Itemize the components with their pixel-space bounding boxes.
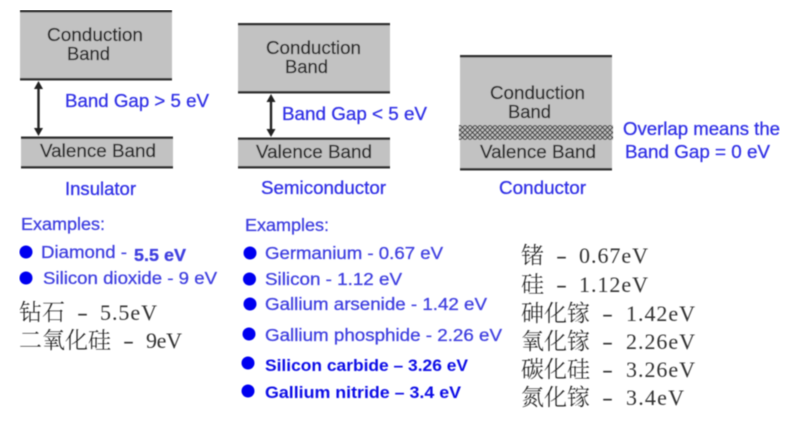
panel: semiconductor diagram [238, 23, 427, 198]
conduction band block: Conduction [47, 25, 143, 45]
row: silicon dioxide [19, 322, 182, 355]
conduction band block [238, 23, 390, 94]
overlapping bands block: Band [508, 102, 551, 122]
row: silicon carbide: - [602, 357, 613, 382]
row: germanium: 0.67eV [579, 243, 648, 268]
item: diamond: Diamond - [41, 242, 127, 262]
row: silicon carbide: 碳化硅 [521, 351, 590, 384]
row: diamond: 钻石 [19, 294, 65, 327]
conduction band block: Conduction [266, 38, 361, 58]
panel: conductor diagram [459, 55, 780, 198]
examples heading: Examples: [245, 215, 329, 235]
row: gallium nitride: - [602, 385, 613, 410]
row: silicon dioxide: - [123, 328, 134, 353]
row: gallium arsenide: 砷化镓 [521, 295, 590, 328]
band gap label: Band Gap > 5 eV [65, 91, 209, 111]
overlap label: Overlap means the [623, 119, 780, 139]
overlap label [623, 119, 780, 162]
conduction band block: Band [285, 57, 328, 77]
row: silicon [521, 266, 648, 299]
row: gallium nitride: 氮化镓 [521, 379, 590, 412]
valence band block [238, 138, 390, 168]
row: diamond: 5.5eV [100, 300, 157, 325]
overlapping bands block: Valence Band [480, 142, 596, 162]
row: diamond [19, 294, 157, 327]
panel: insulator diagram [20, 10, 209, 199]
arrow: band gap [266, 94, 276, 137]
row: silicon: 1.12eV [579, 272, 648, 297]
row: gallium nitride [521, 379, 684, 412]
row: gallium phosphide: 2.26eV [626, 329, 695, 354]
valence band block [21, 136, 173, 168]
row: germanium [521, 237, 648, 270]
row: gallium phosphide: 氧化镓 [521, 323, 590, 356]
conduction band block: Band [67, 44, 110, 64]
item: silicon dioxide: Silicon dioxide - 9 eV [43, 268, 217, 288]
item: gallium nitride: Gallium nitride – 3.4 eV [265, 383, 462, 402]
item: gallium phosphide: Gallium phosphide - 2.26 eV [265, 325, 502, 345]
chinese list: insulators [19, 294, 182, 355]
row: silicon dioxide: 9eV [146, 328, 182, 353]
overlap label: Band Gap = 0 eV [625, 142, 770, 162]
list: insulator examples [20, 214, 217, 288]
row: gallium arsenide [521, 295, 695, 328]
row: silicon dioxide: 二氧化硅 [19, 322, 111, 355]
row: germanium: - [556, 243, 567, 268]
overlapping bands block [459, 55, 613, 170]
row: gallium arsenide: - [602, 301, 613, 326]
row: gallium phosphide: - [602, 329, 613, 354]
row: silicon carbide [521, 351, 695, 384]
list: semiconductor examples [242, 215, 502, 402]
row: gallium nitride: 3.4eV [626, 385, 684, 410]
insulator caption: Insulator [65, 179, 136, 199]
conductor caption: Conductor [499, 178, 586, 198]
item: silicon carbide: Silicon carbide – 3.26 eV [265, 356, 469, 375]
arrow: band gap [34, 81, 43, 136]
item: diamond [20, 242, 186, 265]
band gap label: Band Gap < 5 eV [282, 104, 427, 124]
item: gallium arsenide: Gallium arsenide - 1.42 eV [265, 294, 487, 314]
valence band block: Valence Band [40, 141, 156, 161]
item: germanium: Germanium - 0.67 eV [265, 243, 443, 263]
row: diamond: - [77, 300, 88, 325]
chinese list: semiconductors [521, 237, 695, 412]
valence band block: Valence Band [256, 142, 372, 162]
row: gallium arsenide: 1.42eV [626, 301, 695, 326]
item: diamond: 5.5 eV [134, 245, 186, 265]
row: silicon carbide: 3.26eV [626, 357, 695, 382]
row: silicon: 硅 [521, 266, 544, 299]
row: gallium phosphide [521, 323, 695, 356]
overlapping bands block: Conduction [490, 83, 585, 103]
row: germanium: 锗 [521, 237, 544, 270]
semiconductor caption: Semiconductor [261, 178, 386, 198]
examples heading: Examples: [21, 214, 105, 234]
item: silicon: Silicon - 1.12 eV [265, 269, 402, 289]
row: silicon: - [556, 272, 567, 297]
conduction band block [20, 10, 172, 80]
